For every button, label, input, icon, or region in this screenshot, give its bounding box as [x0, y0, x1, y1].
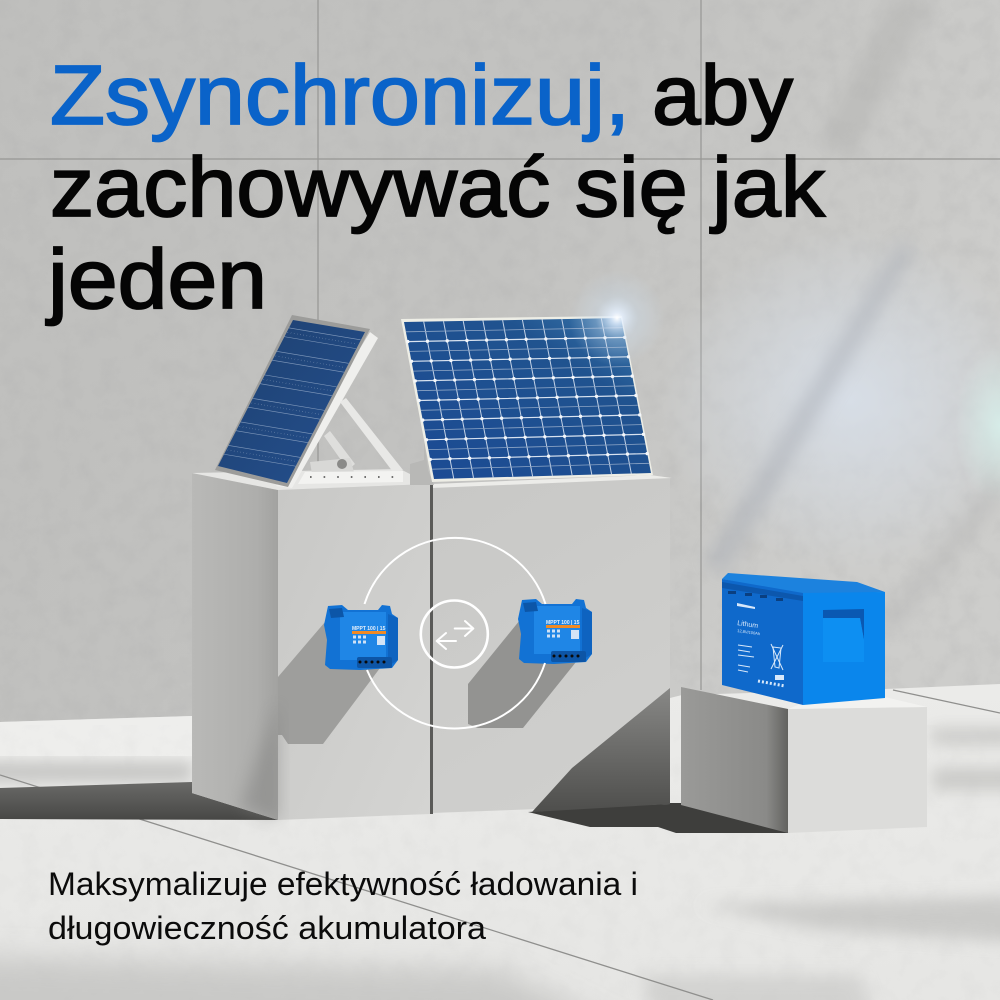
floor soft shadows and joints: [0, 690, 1000, 1000]
title: zachowywać się jak: [50, 140, 826, 234]
left charge controller: MPPT 100 | 15: [352, 626, 386, 632]
joint between blocks: [430, 484, 433, 814]
left charge controller: [324, 605, 398, 670]
subtitle: długowieczność akumulatora: [48, 910, 486, 946]
panel stand: [276, 332, 403, 488]
left concrete block: [192, 469, 430, 820]
small concrete block: [681, 687, 927, 833]
battery label: [737, 603, 785, 686]
title: Zsynchronizuj,: [50, 48, 630, 142]
subtitle: Maksymalizuje efektywność ładowania i: [48, 866, 638, 902]
sun flare: [569, 270, 665, 366]
right charge controller: [518, 599, 592, 664]
wall light glow and diagonal streaks: [660, 0, 1000, 635]
title: [45, 48, 826, 326]
solar panel on left block: [215, 315, 403, 488]
sync circle with arrows: [364, 538, 546, 728]
floor: [0, 684, 1000, 1000]
concrete wall background: [0, 0, 1000, 725]
battery label: 12,8V/100Ah: [737, 628, 760, 636]
title: jeden: [45, 232, 267, 326]
right charge controller: MPPT 100 | 15: [546, 620, 580, 626]
middle concrete block: [432, 475, 672, 813]
title: aby: [652, 48, 793, 142]
solar panel on middle block: [401, 316, 653, 485]
floor hard shadows: [0, 782, 790, 833]
battery label: Lithum: [737, 620, 759, 630]
subtitle: [48, 866, 638, 946]
battery: [722, 573, 885, 705]
